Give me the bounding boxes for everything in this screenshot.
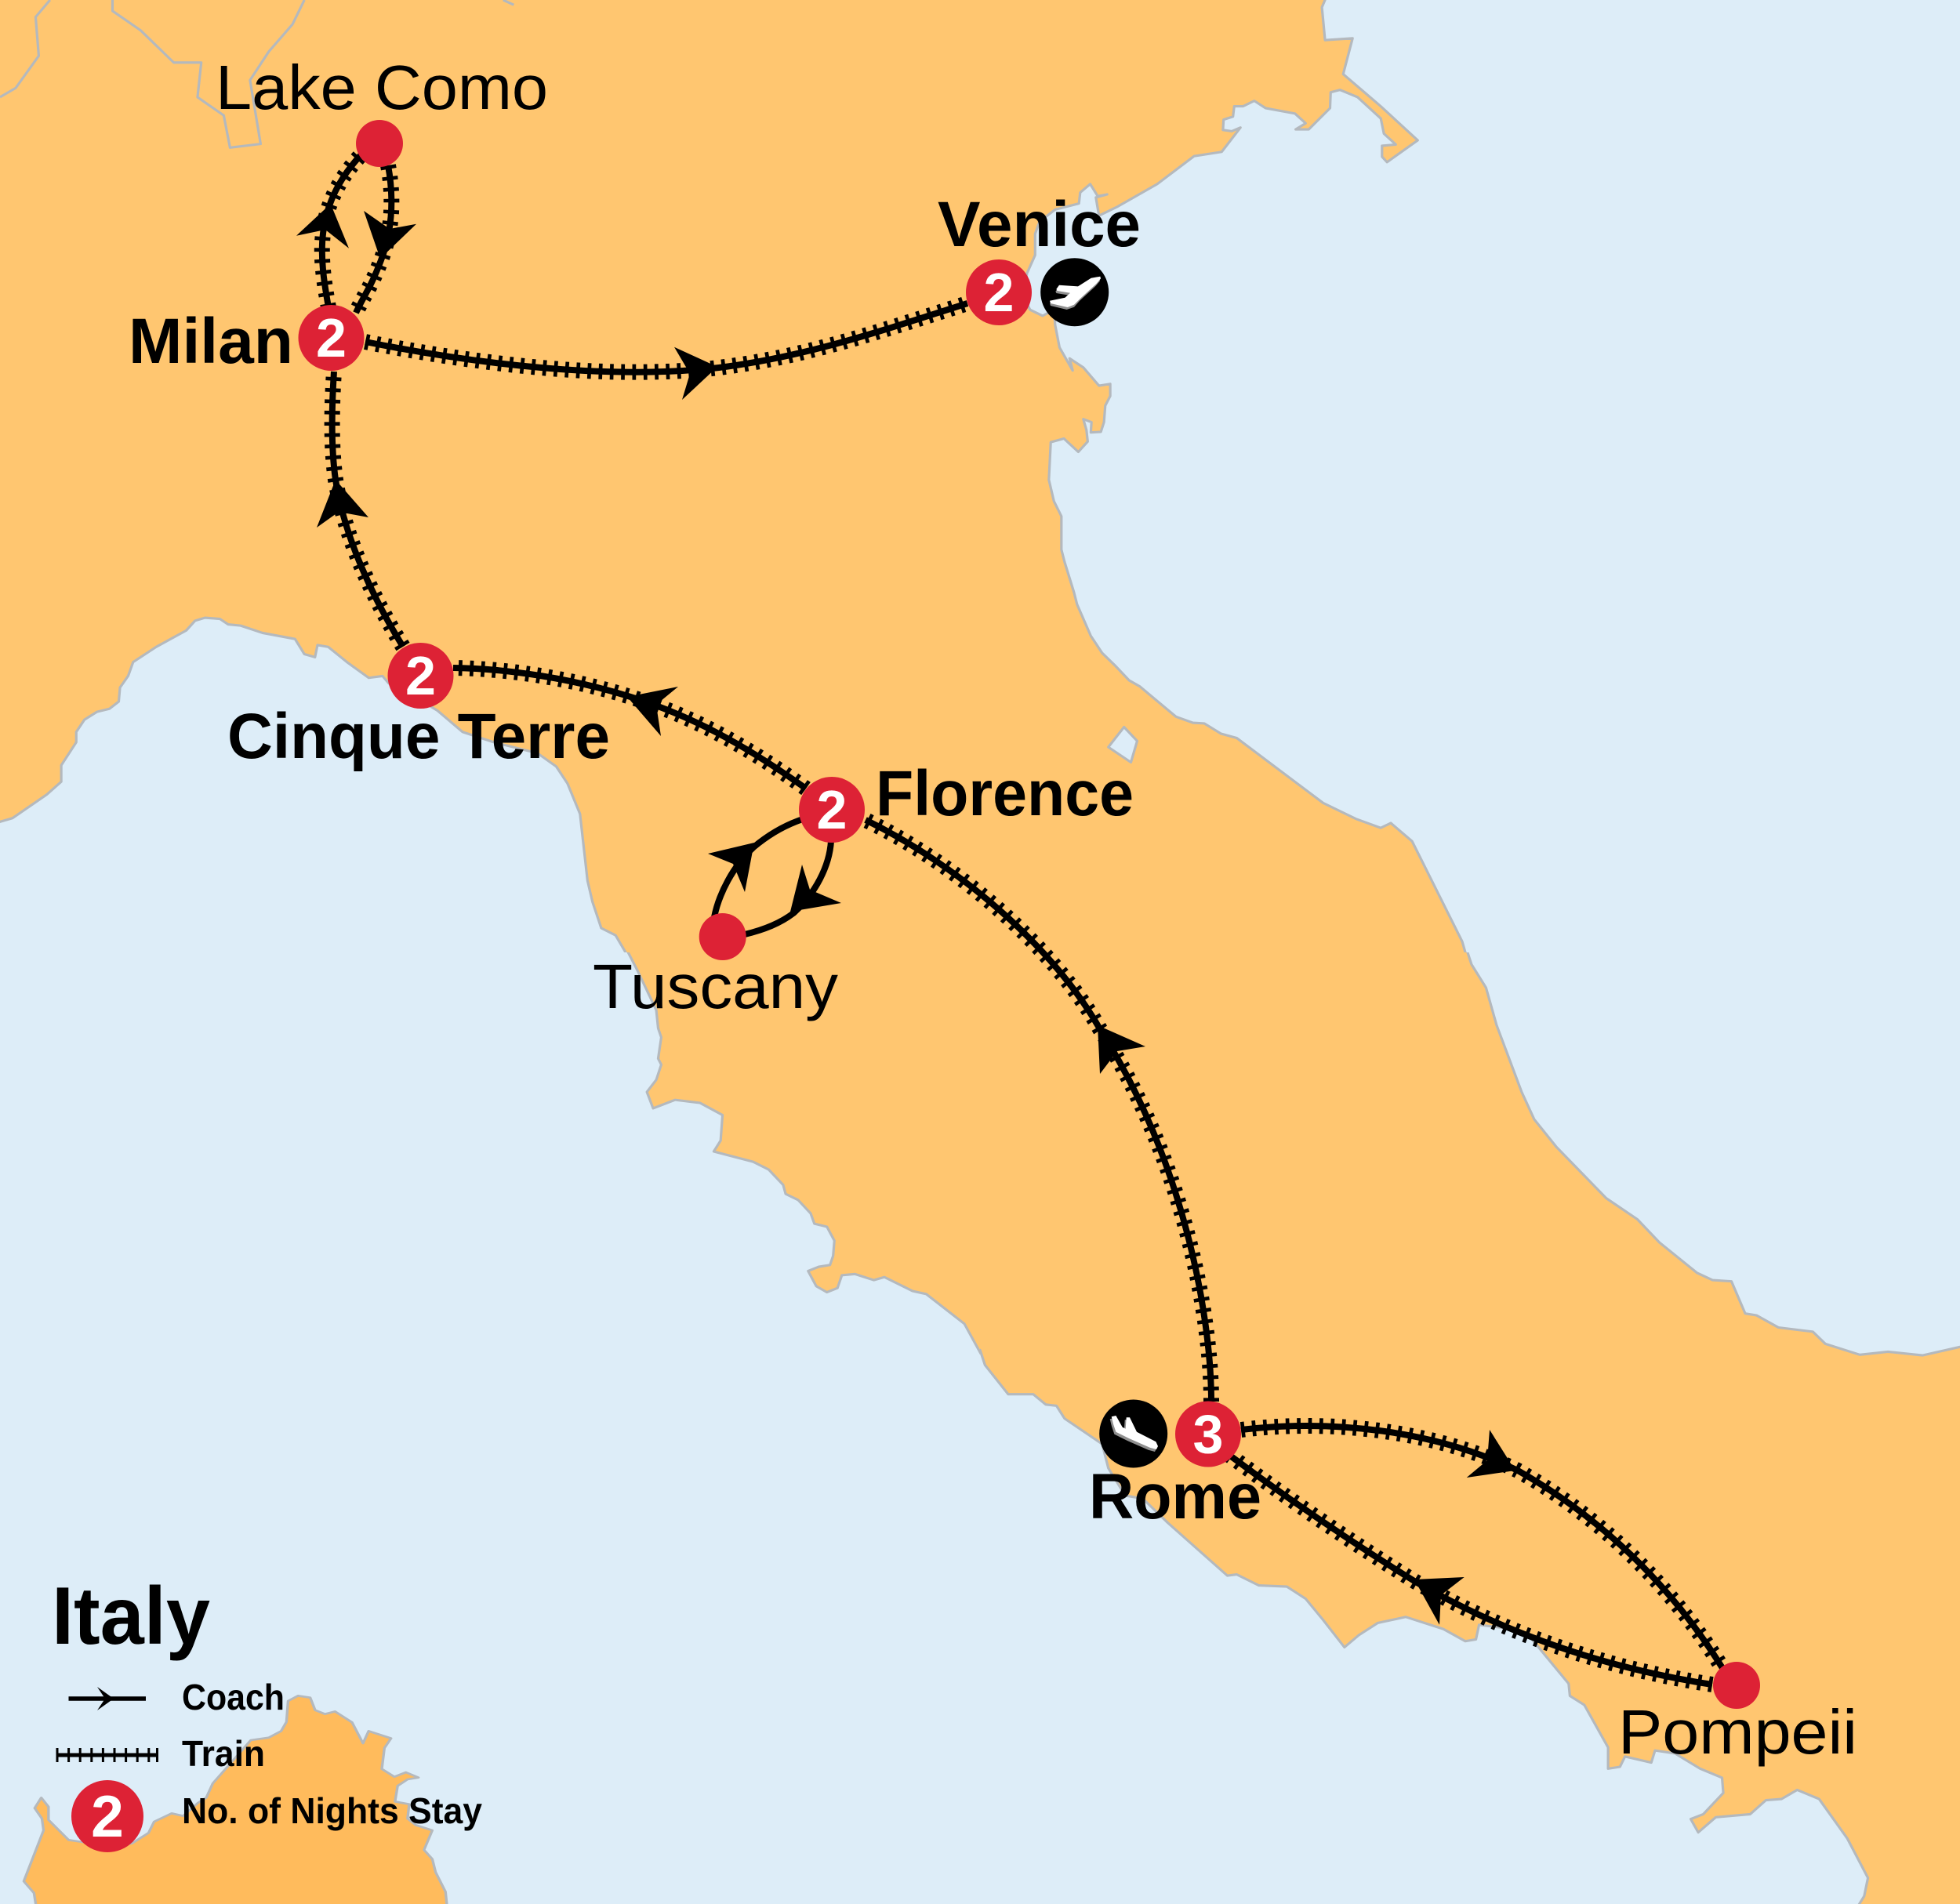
legend: nights stay: 2 xyxy=(91,1783,124,1849)
icon: plane arriving at Rome xyxy=(1099,1400,1167,1467)
stop: Florence xyxy=(799,758,1134,843)
stop: Florence: Florence xyxy=(876,758,1134,829)
route: train Florence to Cinque Terre xyxy=(453,668,806,789)
icon: plane departing from Venice xyxy=(1040,258,1109,326)
route: train Milan to Lake Como xyxy=(296,155,361,307)
stop: Tuscany: Tuscany xyxy=(593,952,838,1021)
legend: nights stay: No. of Nights Stay xyxy=(182,1790,482,1831)
land: island in the legend corner xyxy=(22,1695,448,1904)
legend: nights stay xyxy=(71,1780,482,1852)
stop: Milan: 2 xyxy=(316,307,347,368)
route: coach Tuscany to Florence xyxy=(708,819,803,917)
legend: coach: Coach xyxy=(182,1677,285,1717)
stop: Cinque Terre xyxy=(227,643,610,772)
stop: Venice: Venice xyxy=(938,189,1141,260)
stop: Lake Como: Lake Como xyxy=(216,53,548,122)
stop: Rome: Rome xyxy=(1089,1461,1261,1532)
stop: Venice: 2 xyxy=(984,262,1014,323)
route: coach Florence to Tuscany xyxy=(745,841,841,934)
land: Adriatic coast xyxy=(980,0,1467,952)
stop: Rome xyxy=(1089,1402,1261,1532)
stop: Florence: 2 xyxy=(817,779,847,840)
legend: coach xyxy=(69,1677,285,1717)
stop: Lake Como xyxy=(216,53,548,167)
land: northern Italy and Ligurian Sea xyxy=(0,0,980,952)
stop: Milan xyxy=(129,305,364,377)
route: train Milan to Venice xyxy=(365,303,967,400)
stop: Rome: 3 xyxy=(1193,1403,1223,1464)
route: train Cinque Terre to Milan xyxy=(317,372,403,647)
land: Tuscan coast xyxy=(627,952,980,1355)
title: Italy xyxy=(52,1571,210,1662)
stop: Milan: Milan xyxy=(129,306,293,377)
stop: Pompeii xyxy=(1618,1662,1857,1767)
route: train Rome to Pompeii xyxy=(1241,1426,1722,1668)
legend xyxy=(56,1677,482,1852)
route: train Rome to Florence xyxy=(866,820,1211,1402)
legend: train: Train xyxy=(182,1733,265,1774)
land: southern Italy xyxy=(980,952,1960,1904)
stop: Tuscany xyxy=(593,913,838,1021)
stop: Venice xyxy=(938,189,1141,325)
stop: Cinque Terre: 2 xyxy=(405,645,436,706)
stop: Pompeii: Pompeii xyxy=(1618,1697,1857,1767)
route: train Lake Como to Milan xyxy=(356,165,416,313)
stop: Cinque Terre: Cinque Terre xyxy=(227,701,610,772)
route: train Pompeii to Rome xyxy=(1230,1456,1712,1685)
